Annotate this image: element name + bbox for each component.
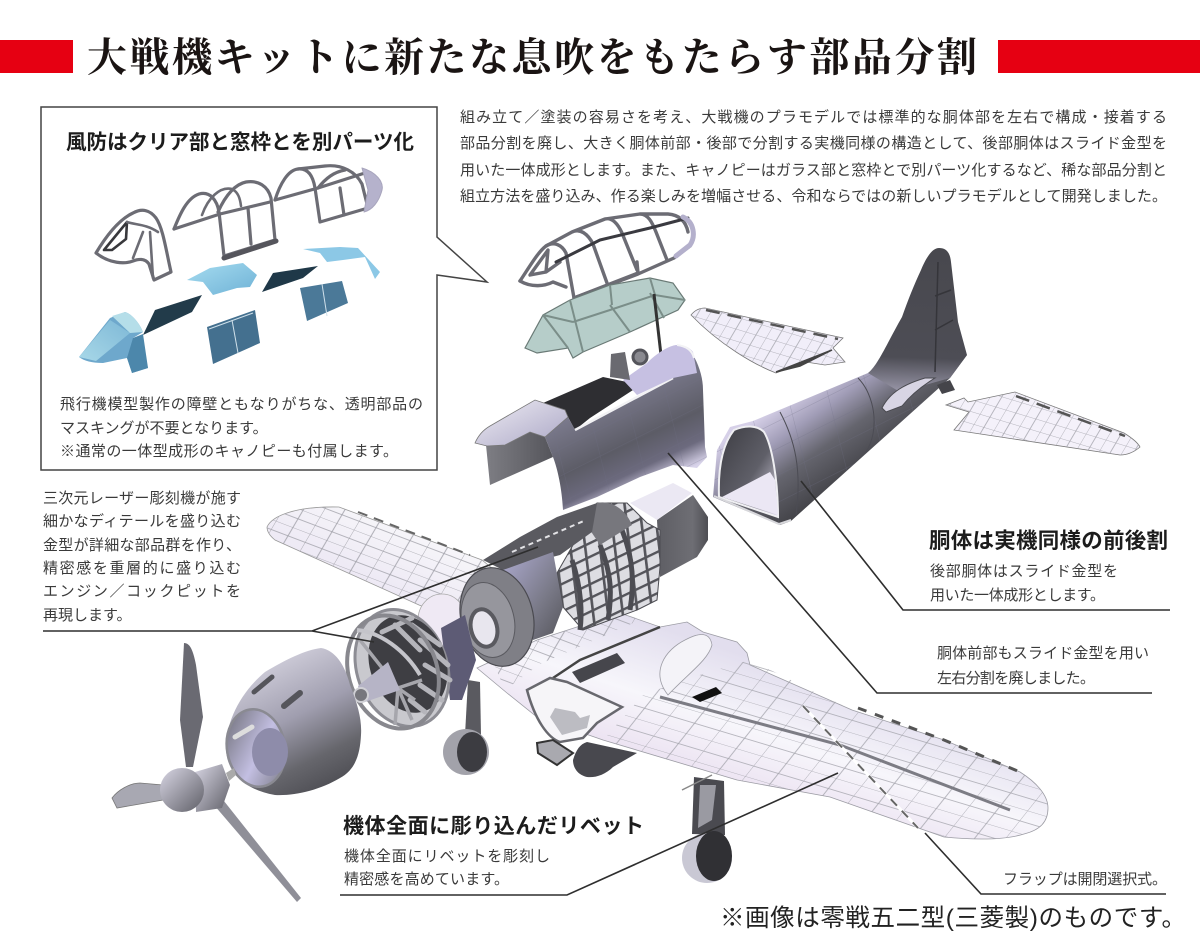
caption: rivets: 精密感を高めています。 [344,871,509,888]
caption: engine and cockpit detail: 細かなディテールを盛り込む [43,512,241,530]
tailplane left [691,308,845,373]
underwing radiator [537,740,573,765]
dark slot [572,653,625,683]
icon: middle canopy frame [174,182,276,258]
caption: rear fuselage [929,529,1168,604]
tailplane right [946,392,1140,455]
main gear left [443,680,489,775]
behind engine fuselage stub [418,594,466,646]
caption: engine and cockpit detail: 金型が詳細な部品群を作り、 [43,537,241,554]
caption: flaps: フラップは開閉選択式。 [1003,871,1167,888]
red bar right [998,40,1200,73]
intro text block: 組立方法を盛り込み、作る楽しみを増幅させる、令和ならではの新しいプラモデルとして開発しました。 [460,187,1167,205]
footnote: ※画像は零戦五二型(三菱製)のものです。 [720,904,1186,932]
leader: flaps [925,833,1166,894]
main gear right [682,775,732,883]
title: 大戦機キットに新たな息吹をもたらす部品分割 [87,35,977,80]
cockpit equipment [483,503,597,570]
icon: rear canopy frame [275,166,382,222]
rear cylinder of cockpit section [630,483,708,577]
canopy glass lines [543,278,685,352]
left wing [267,507,530,625]
caption: front fuselage: 胴体前部もスライド金型を用い [937,645,1149,662]
radial engine [332,596,465,742]
intro text block [460,108,1167,205]
front fuselage [475,345,707,510]
propeller [112,643,301,902]
intro text block: 部品分割を廃し、大きく胴体前部・後部で分割する実機同様の構造として、後部胴体はスライド金型を [460,135,1167,152]
caption: engine and cockpit detail: 再現します。 [43,607,132,624]
caption: front fuselage: 左右分割を廃しました。 [937,670,1095,687]
panel body text: 飛行機模型製作の障壁ともなりがちな、透明部品の [60,396,423,413]
leader: engine and cockpit [43,547,538,642]
gun mount [610,352,630,380]
sight ring [633,350,647,364]
caption: engine and cockpit detail: エンジン／コックピットを [43,583,241,600]
caption: rivets: 機体全面にリベットを彫刻し [344,848,550,865]
red bar left [0,40,73,73]
top decking [623,345,697,395]
callout box with pointer [41,107,487,470]
caption: rear fuselage: 後部胴体はスライド金型を [930,563,1118,580]
intro text block: 用いた一体成形とします。また、キャノピーはガラス部と窓枠とで別パーツ化するなど、稀な部品分割と [460,162,1167,179]
main aircraft exploded view [112,214,1140,902]
caption: rivets [343,815,644,888]
instrument bulkhead [590,502,632,545]
cockpit interior [543,377,633,430]
caption: engine and cockpit detail: 精密感を重層的に盛り込む [43,560,241,577]
intro text block: 組み立て／塗装の容易さを考え、大戦機のプラモデルでは標準的な胴体部を左右で構成・接着する [460,108,1167,126]
panel body text: マスキングが不要となります。 [60,420,268,437]
nose underside [486,432,553,485]
leader: front fuselage [668,453,1152,693]
caption: engine and cockpit detail [43,490,241,624]
panel heading: 風防はクリア部と窓枠とを別パーツ化 [66,131,414,154]
engine cowling [221,648,361,795]
caption: rivets: 機体全面に彫り込んだリベット [343,815,644,838]
underwing drop tank [573,742,637,777]
wheel well [527,678,622,742]
nose top [475,400,568,446]
caption: front fuselage [937,645,1149,687]
cage ribs [572,530,632,630]
icon: clear glass parts [79,247,380,373]
engine mount [441,615,476,700]
panel: canopy parts callout [41,107,487,470]
panel body text: ※通常の一体型成形のキャノピーも付属します。 [60,443,398,460]
canopy frame [520,214,693,298]
cockpit cage [557,503,660,630]
mid cylinder [503,552,563,640]
panel body text [60,396,423,460]
caption: rear fuselage: 用いた一体成形とします。 [930,587,1105,604]
rear fuselage [713,248,967,525]
caption: engine and cockpit detail: 三次元レーザー彫刻機が施す [43,490,241,507]
cockpit wire detail [512,520,586,552]
antenna mast [654,294,661,355]
clear canopy [525,278,685,358]
fuselage center wing and right wing [477,613,1048,839]
icon: windshield frame [96,210,171,280]
leader: rear fuselage [801,481,1170,610]
leader: rivets [340,773,838,895]
caption: rear fuselage: 胴体は実機同様の前後割 [929,529,1168,553]
bulkhead disc [450,560,544,674]
